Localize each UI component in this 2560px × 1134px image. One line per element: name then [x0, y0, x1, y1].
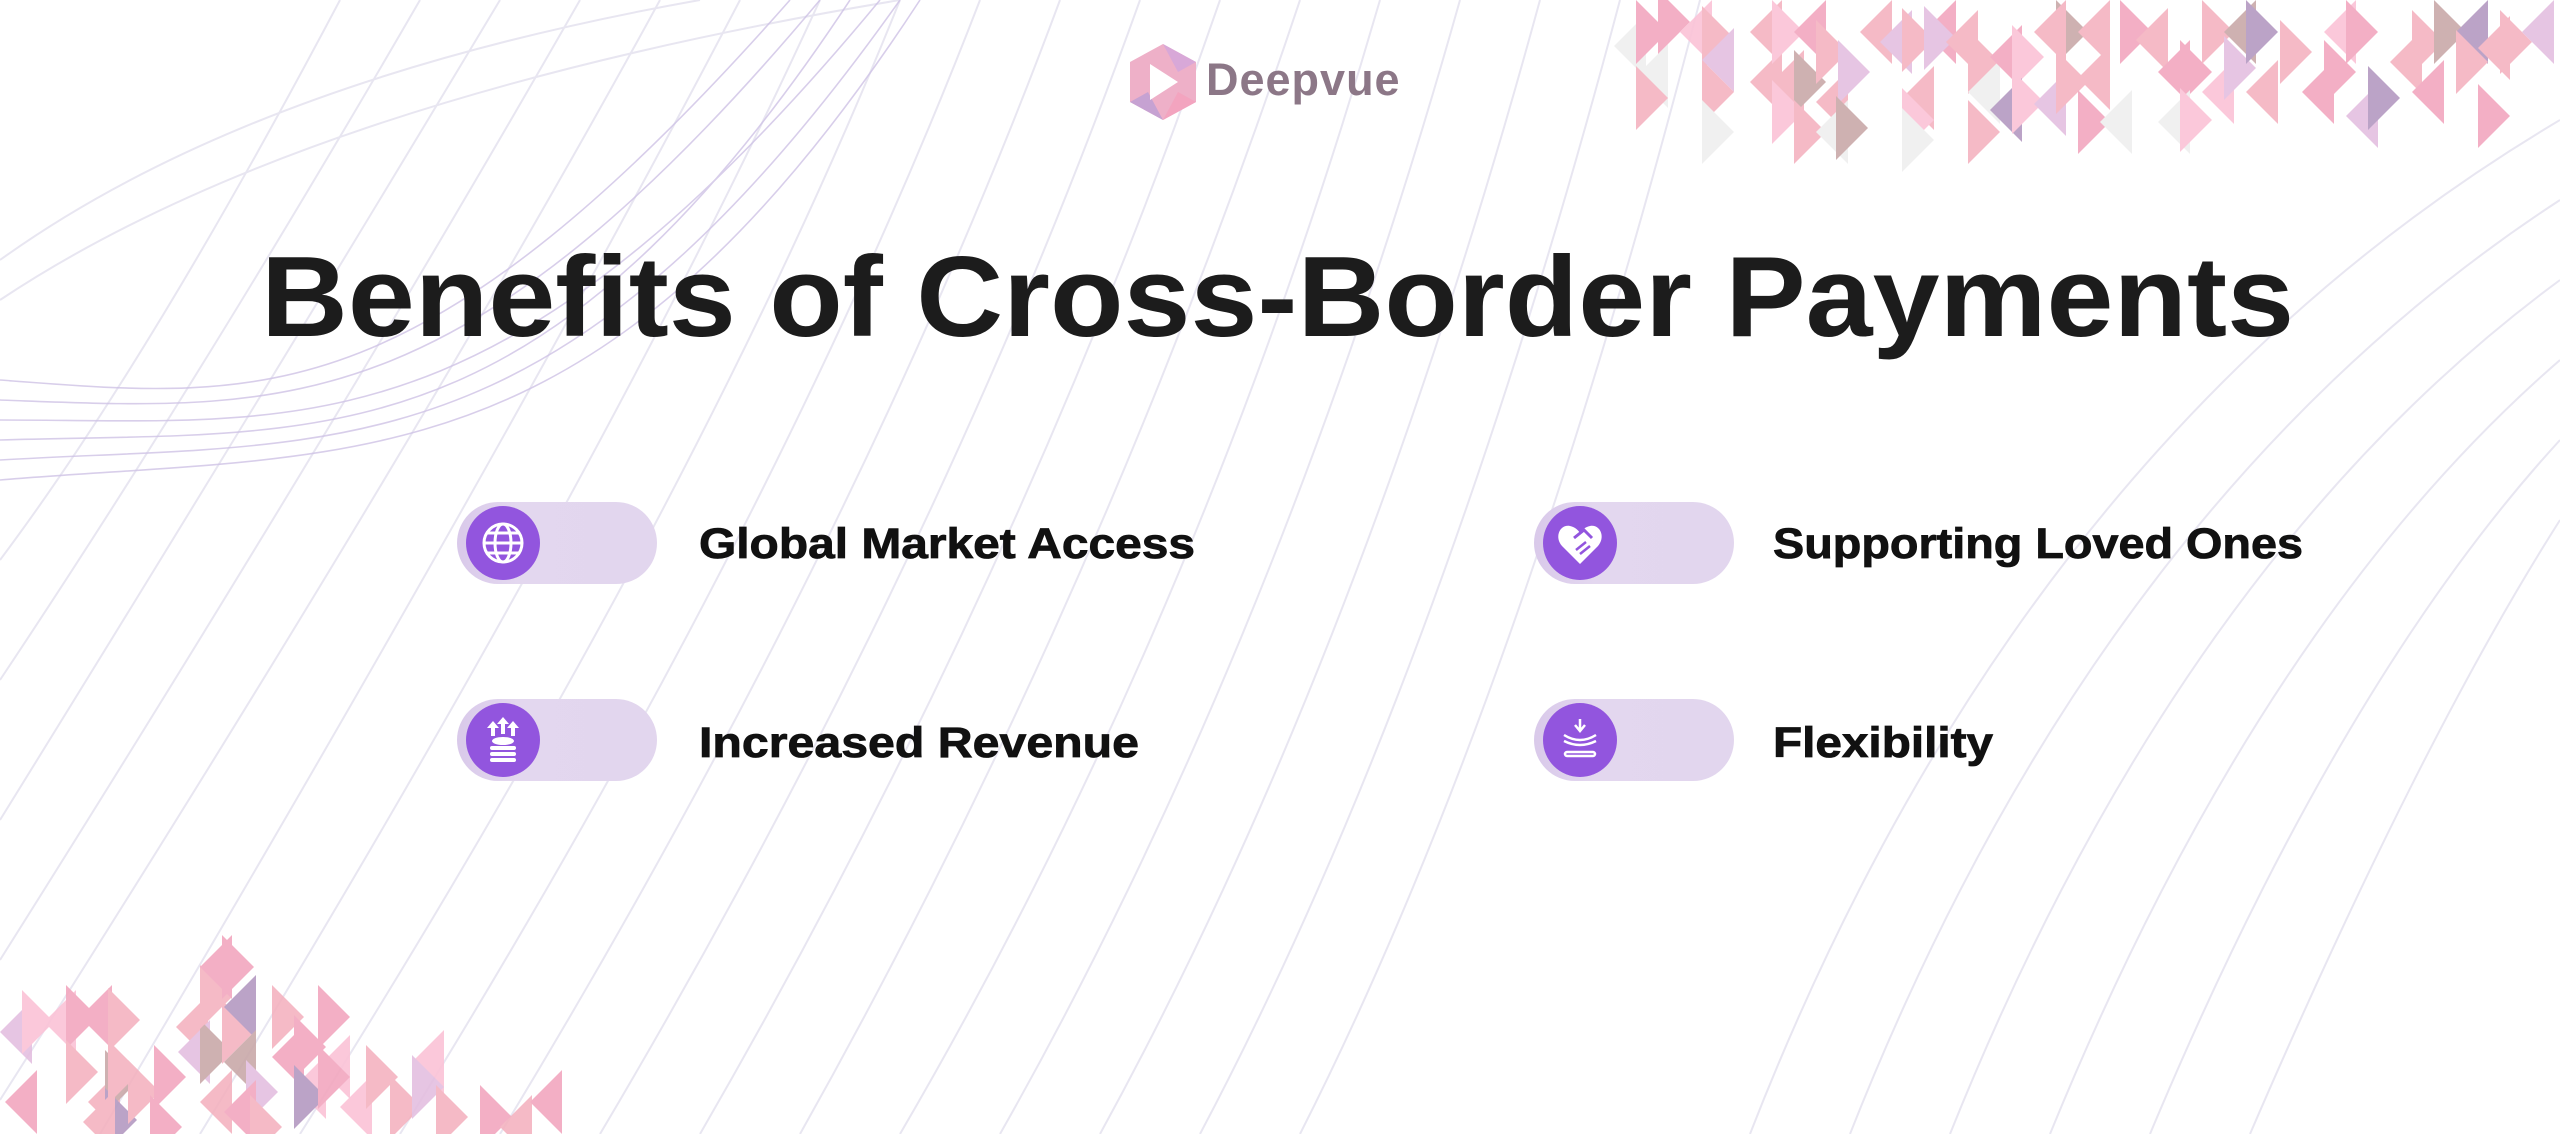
label: Flexibility — [1773, 719, 1993, 767]
pill with globe icon — [457, 502, 657, 584]
title: Benefits of Cross-Border Payments — [261, 234, 2294, 361]
icon: hexagon logo — [1130, 44, 1196, 120]
benefit: Increased Revenue — [457, 699, 1139, 781]
logo — [1130, 44, 1401, 120]
label: Increased Revenue — [699, 719, 1139, 767]
label: Supporting Loved Ones — [1773, 520, 2303, 568]
pill with revenue icon — [457, 699, 657, 781]
brand name: Deepvue — [1206, 54, 1401, 105]
pill with flexibility icon — [1534, 699, 1734, 781]
label: Global Market Access — [699, 520, 1195, 568]
benefit: Flexibility — [1534, 699, 1994, 781]
pill with heart-handshake icon — [1534, 502, 1734, 584]
benefit: Global Market Access — [457, 502, 1195, 584]
benefit: Supporting Loved Ones — [1534, 502, 2303, 584]
